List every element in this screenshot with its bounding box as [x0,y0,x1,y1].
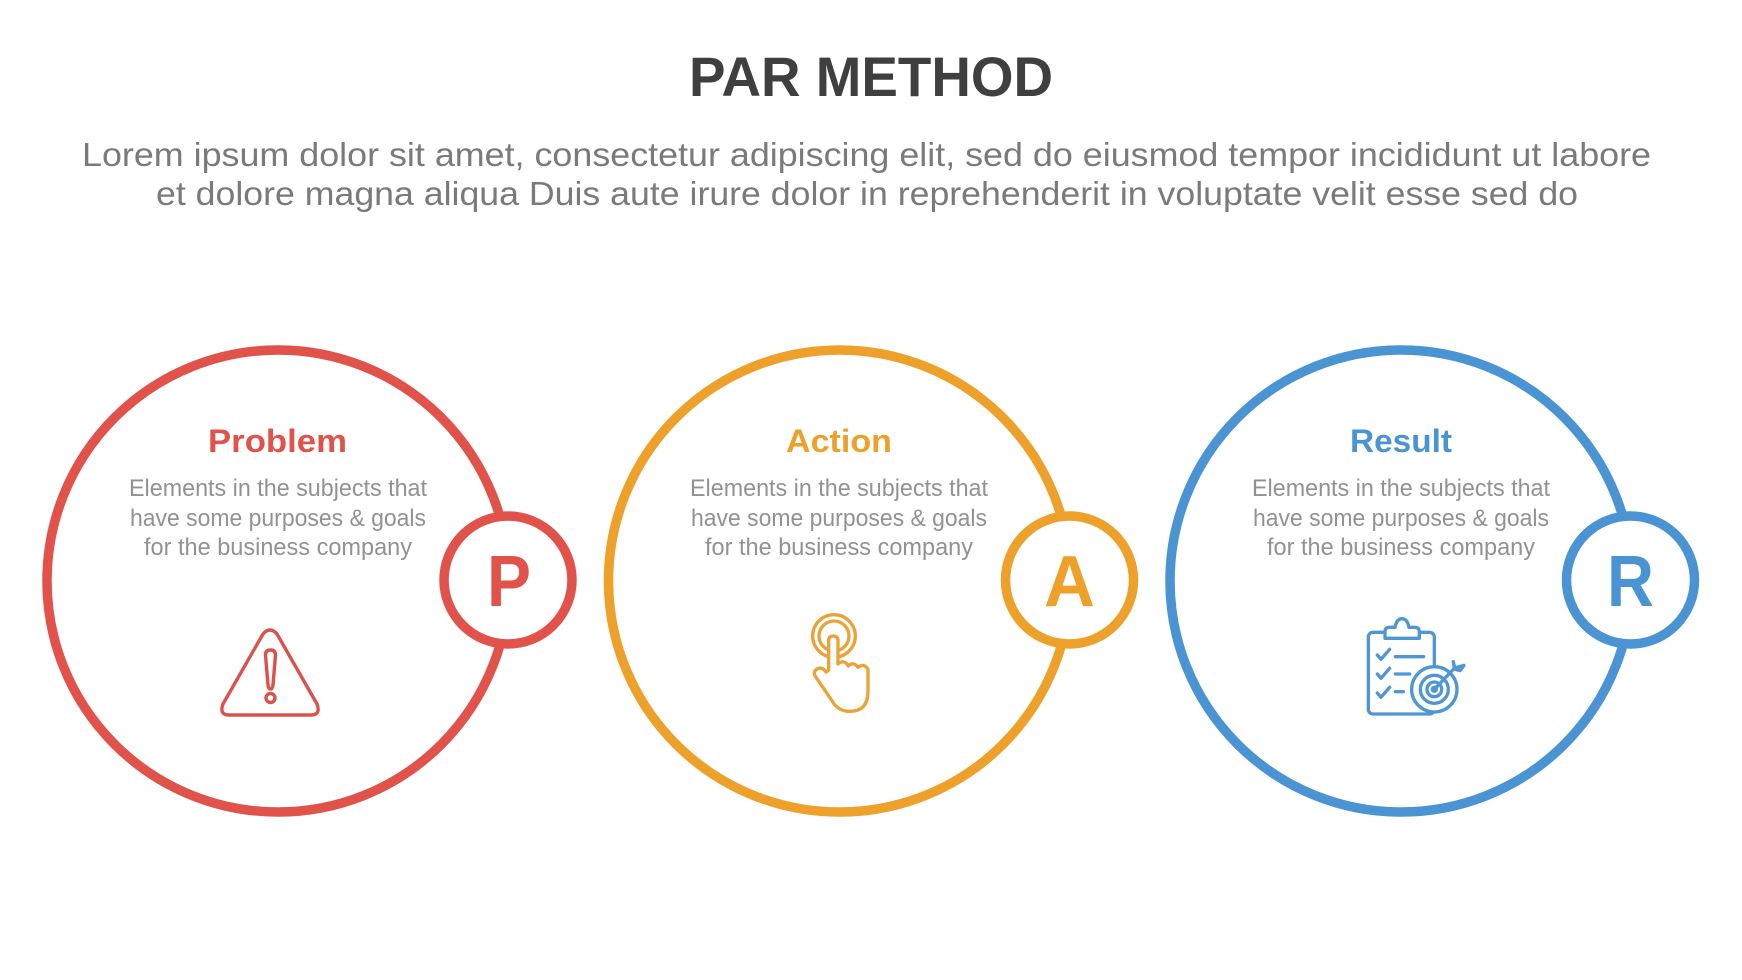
panel: action [608,350,1134,812]
result description: Elements in the subjects that [1252,475,1550,502]
subtitle text: et dolore magna aliqua Duis aute irure dolor in reprehenderit in voluptate velit esse sed do [156,175,1578,212]
title: PAR METHOD [689,45,1053,108]
action description: have some purposes & goals [691,505,987,532]
problem letter badge: P [487,542,531,622]
problem letter badge [444,516,572,644]
action description: Elements in the subjects that [690,475,988,502]
result main circle [1170,350,1632,812]
result description: for the business company [1267,534,1535,561]
icon: pointing hand [813,615,868,711]
result heading: Result [1350,423,1452,459]
action description [690,475,988,561]
problem description: Elements in the subjects that [129,475,427,502]
action heading: Action [786,423,892,459]
result letter badge [1566,516,1694,644]
result description [1252,475,1550,561]
icon: warning triangle [222,630,318,715]
result letter badge: R [1607,542,1654,622]
action description: for the business company [705,534,973,561]
action letter badge: A [1044,542,1095,622]
problem description: for the business company [144,534,412,561]
result description: have some purposes & goals [1253,505,1549,532]
problem main circle [47,350,509,812]
panel: result [1170,350,1694,812]
subtitle text: Lorem ipsum dolor sit amet, consectetur adipiscing elit, sed do eiusmod tempor incididunt ut labore [82,136,1651,173]
icon: clipboard with target [1368,619,1464,714]
problem description [129,475,427,561]
action main circle [608,350,1070,812]
panel: problem [47,350,572,812]
problem heading: Problem [208,423,347,459]
action letter badge [1006,516,1134,644]
problem description: have some purposes & goals [130,505,426,532]
subtitle text [82,136,1651,212]
